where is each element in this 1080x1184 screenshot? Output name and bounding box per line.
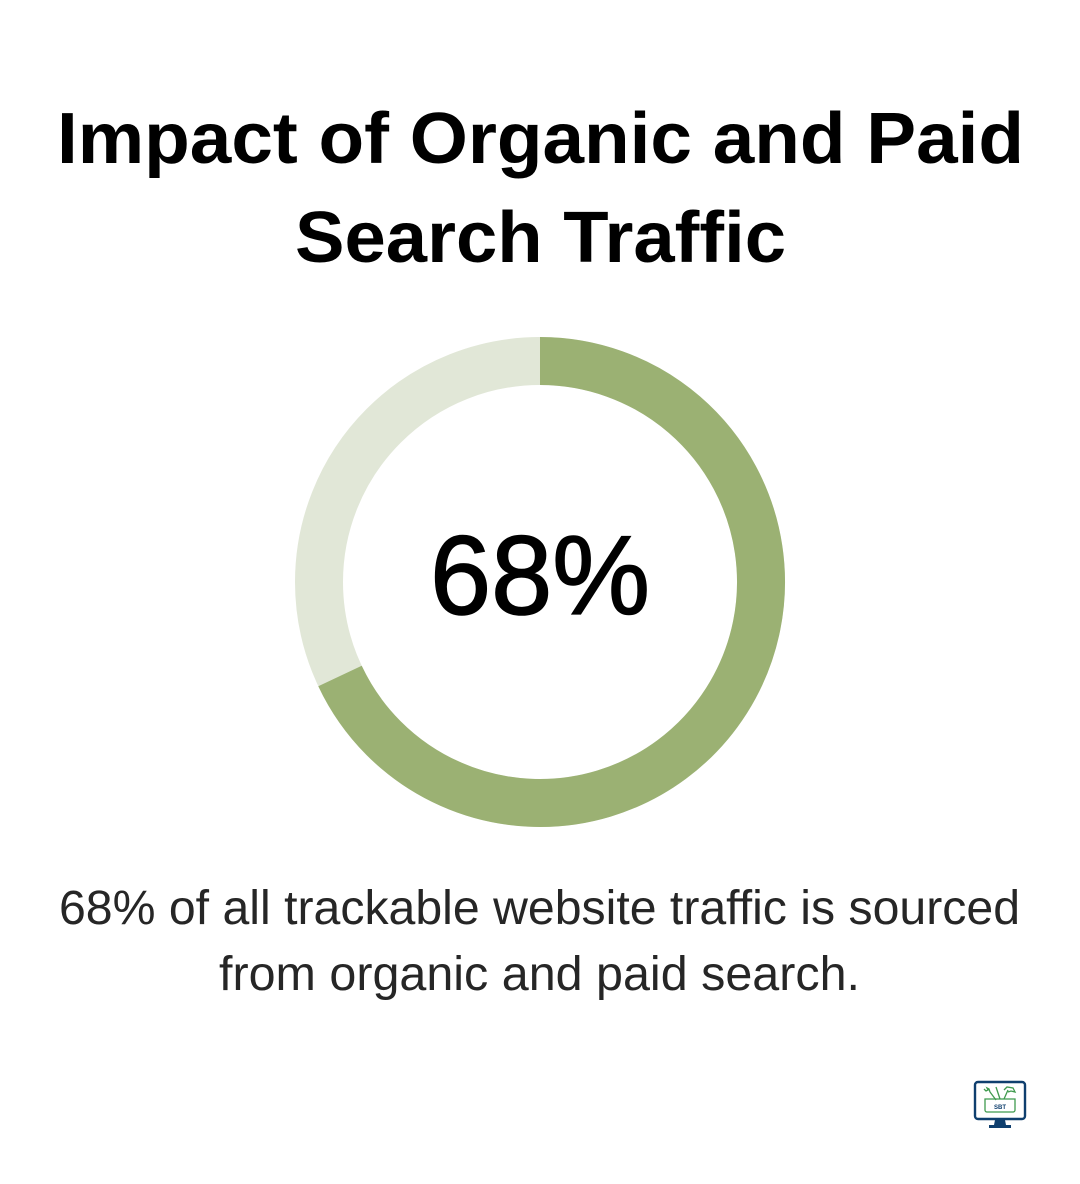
description text: 68% of all trackable website traffic is sourced <box>59 882 1020 935</box>
monitor frame <box>975 1082 1025 1119</box>
title: Impact of Organic and Paid <box>57 99 1024 179</box>
center value: 68% <box>430 513 650 638</box>
description text <box>59 882 1020 1001</box>
toolbox and tools <box>984 1087 1015 1112</box>
icon: monitor logo with toolbox <box>975 1082 1025 1128</box>
title: Search Traffic <box>295 198 786 278</box>
monitor stand <box>989 1120 1011 1128</box>
description text: from organic and paid search. <box>219 948 860 1001</box>
toolbox label: SBT <box>994 1105 1006 1111</box>
title <box>57 99 1024 278</box>
donut chart: 68% <box>319 361 761 803</box>
donut value arc <box>340 361 761 803</box>
donut track <box>319 361 761 803</box>
